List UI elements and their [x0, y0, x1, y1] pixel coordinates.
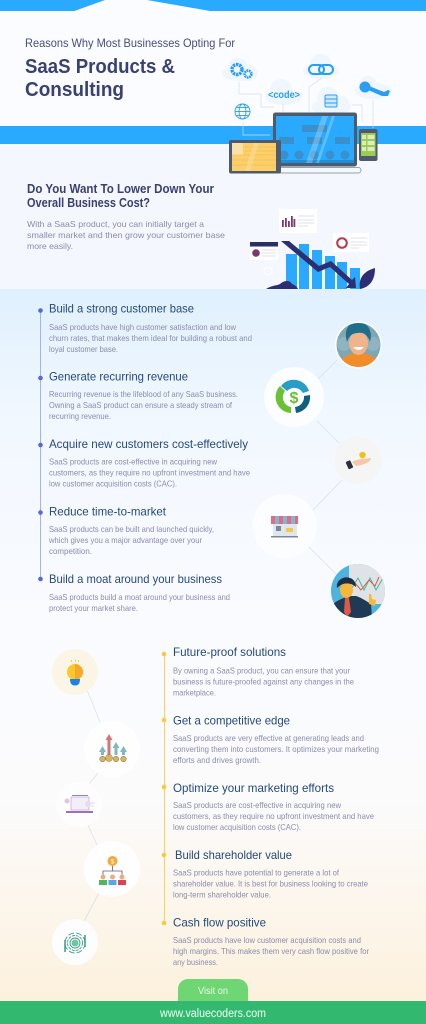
intro text: smaller market and then grow your customer base — [27, 230, 225, 240]
item: marketing efforts — [173, 781, 374, 832]
item: customer base: SaaS products have high customer satisfaction and low — [49, 322, 237, 332]
footer bar: www.valuecoders.com — [159, 1008, 266, 1020]
bars — [286, 244, 360, 289]
item: marketing efforts: Optimize your marketing efforts — [173, 781, 334, 795]
phone — [359, 129, 378, 161]
middle blue band — [0, 126, 426, 144]
falling arrow — [281, 241, 356, 288]
footer bar — [0, 1001, 426, 1024]
item: marketing efforts: SaaS products are cost-effective in acquiring new — [173, 800, 342, 810]
icon: link — [309, 65, 333, 74]
list: benefits blue timeline — [38, 302, 252, 613]
icon: code: <code> — [268, 90, 300, 101]
heading: lower business cost — [27, 182, 214, 210]
connectors: right icon chain — [309, 360, 342, 574]
item: customer base: churn rates, that makes them ideal for building a robust and — [49, 333, 252, 343]
intro text: With a SaaS product, you can initially target a — [27, 219, 204, 229]
icon: growth arrows — [84, 721, 140, 777]
item: acquire customers — [49, 437, 250, 488]
item: time to market: SaaS products can be built and launched quickly, — [49, 524, 214, 534]
item: time to market — [48, 504, 214, 556]
item: shareholder value: shareholder value. It is best for business looking to create — [173, 878, 368, 888]
icon: key — [360, 82, 390, 96]
laptop — [273, 112, 361, 173]
illustration: cloud devices — [222, 54, 392, 174]
card: ring — [333, 233, 369, 252]
item: time to market: which gives you a major advantage over your — [48, 535, 202, 545]
item: cash flow: high margins. This makes them very cash flow positive for — [173, 946, 369, 956]
item: customer base: loyal customer base. — [49, 344, 118, 354]
icon: businessman with chart — [331, 564, 385, 618]
item: cash flow: any business. — [173, 957, 218, 967]
intro text: more easily. — [27, 241, 73, 251]
item: recurring revenue: Recurring revenue is the lifeblood of any SaaS business. — [49, 389, 238, 399]
item: recurring revenue: Generate recurring revenue — [49, 370, 188, 384]
clouds — [222, 54, 392, 123]
item: cash flow: SaaS products have low customer acquisition costs and — [173, 935, 361, 945]
icon: gears — [232, 64, 251, 77]
connectors: left icon chain — [82, 690, 100, 925]
item: future proof: By owning a SaaS product, you can ensure that your — [173, 666, 350, 676]
item: acquire customers: low customer acquisition costs (CAC). — [49, 478, 177, 488]
item: competitive edge — [173, 714, 379, 765]
icon: store — [252, 494, 316, 558]
item: acquire customers: SaaS products are cost-effective in acquiring new — [49, 456, 218, 466]
list: benefits yellow timeline — [162, 645, 379, 967]
icon: customer avatar — [335, 322, 382, 370]
timeline — [162, 652, 166, 925]
icon: shareholders — [84, 841, 140, 897]
button: visit on — [178, 979, 248, 1001]
heading: lower business cost: Do You Want To Lower Down Your — [27, 182, 214, 196]
item: marketing efforts: low customer acquisition costs (CAC). — [173, 822, 301, 832]
item: moat: SaaS products build a moat around your business and — [49, 592, 230, 602]
item: cash flow — [173, 916, 369, 967]
item: customer base: Build a strong customer base — [49, 302, 194, 316]
item: future proof: Future-proof solutions — [173, 645, 286, 659]
item: marketing efforts: customers, as they require no upfront investment and have — [173, 811, 374, 821]
card: video — [250, 242, 278, 260]
item: future proof: business is future-proofed against any changes in the — [173, 676, 354, 686]
item: shareholder value: Build shareholder value — [175, 848, 292, 862]
item: recurring revenue: recurring revenue. — [49, 411, 111, 421]
heading: lower business cost: Overall Business Cost? — [27, 196, 150, 210]
card: bars — [279, 209, 317, 233]
icon: shareholders: $ — [111, 858, 115, 866]
item: moat — [49, 572, 230, 613]
item: time to market: competition. — [49, 546, 92, 556]
intro text — [27, 219, 225, 251]
item: shareholder value: SaaS products have potential to generate a lot of — [173, 868, 340, 878]
item: competitive edge: converting them into customers. It optimizes your marketing — [173, 744, 379, 754]
item: acquire customers: Acquire new customers cost-effectively — [49, 437, 248, 451]
item: competitive edge: SaaS products are very effective at generating leads and — [173, 733, 364, 743]
item: moat: Build a moat around your business — [49, 572, 222, 586]
top banner — [0, 0, 426, 12]
icon: light bulb — [52, 649, 98, 695]
item: cash flow: Cash flow positive — [173, 916, 266, 930]
item: competitive edge: efforts and drives growth. — [173, 755, 261, 765]
timeline — [38, 308, 43, 581]
item: future proof — [173, 645, 354, 698]
title: SaaS Products & — [25, 55, 175, 78]
item: recurring revenue — [49, 370, 238, 421]
title: Reasons Why Most Businesses Opting For — [25, 36, 235, 50]
item: future proof: marketplace. — [173, 688, 216, 698]
title: Consulting — [25, 78, 124, 101]
item: competitive edge: Get a competitive edge — [173, 714, 290, 728]
icon: recurring revenue: $ — [290, 390, 299, 407]
illustration: falling cost chart — [250, 209, 375, 289]
item: time to market: Reduce time-to-market — [49, 504, 167, 518]
plants — [266, 268, 375, 289]
button: visit on: Visit on — [198, 986, 228, 997]
item: acquire customers: customers, as they require no upfront investment and have — [49, 468, 250, 478]
icon: database — [325, 95, 337, 107]
item: shareholder value — [173, 848, 368, 900]
title — [25, 36, 235, 101]
item: recurring revenue: Owning a SaaS product can ensure a steady stream of — [49, 400, 233, 410]
icon: hand with coin — [334, 436, 382, 484]
icon: recurring revenue — [264, 367, 324, 427]
icon: globe — [235, 104, 250, 119]
tablet — [229, 140, 281, 174]
item: customer base — [49, 302, 252, 354]
icon: cash flow swirl — [52, 919, 98, 965]
item: shareholder value: long-term shareholder value. — [173, 890, 271, 900]
connector lines — [239, 78, 373, 135]
item: moat: protect your market share. — [49, 603, 138, 613]
icon: marketing laptop — [56, 781, 102, 827]
